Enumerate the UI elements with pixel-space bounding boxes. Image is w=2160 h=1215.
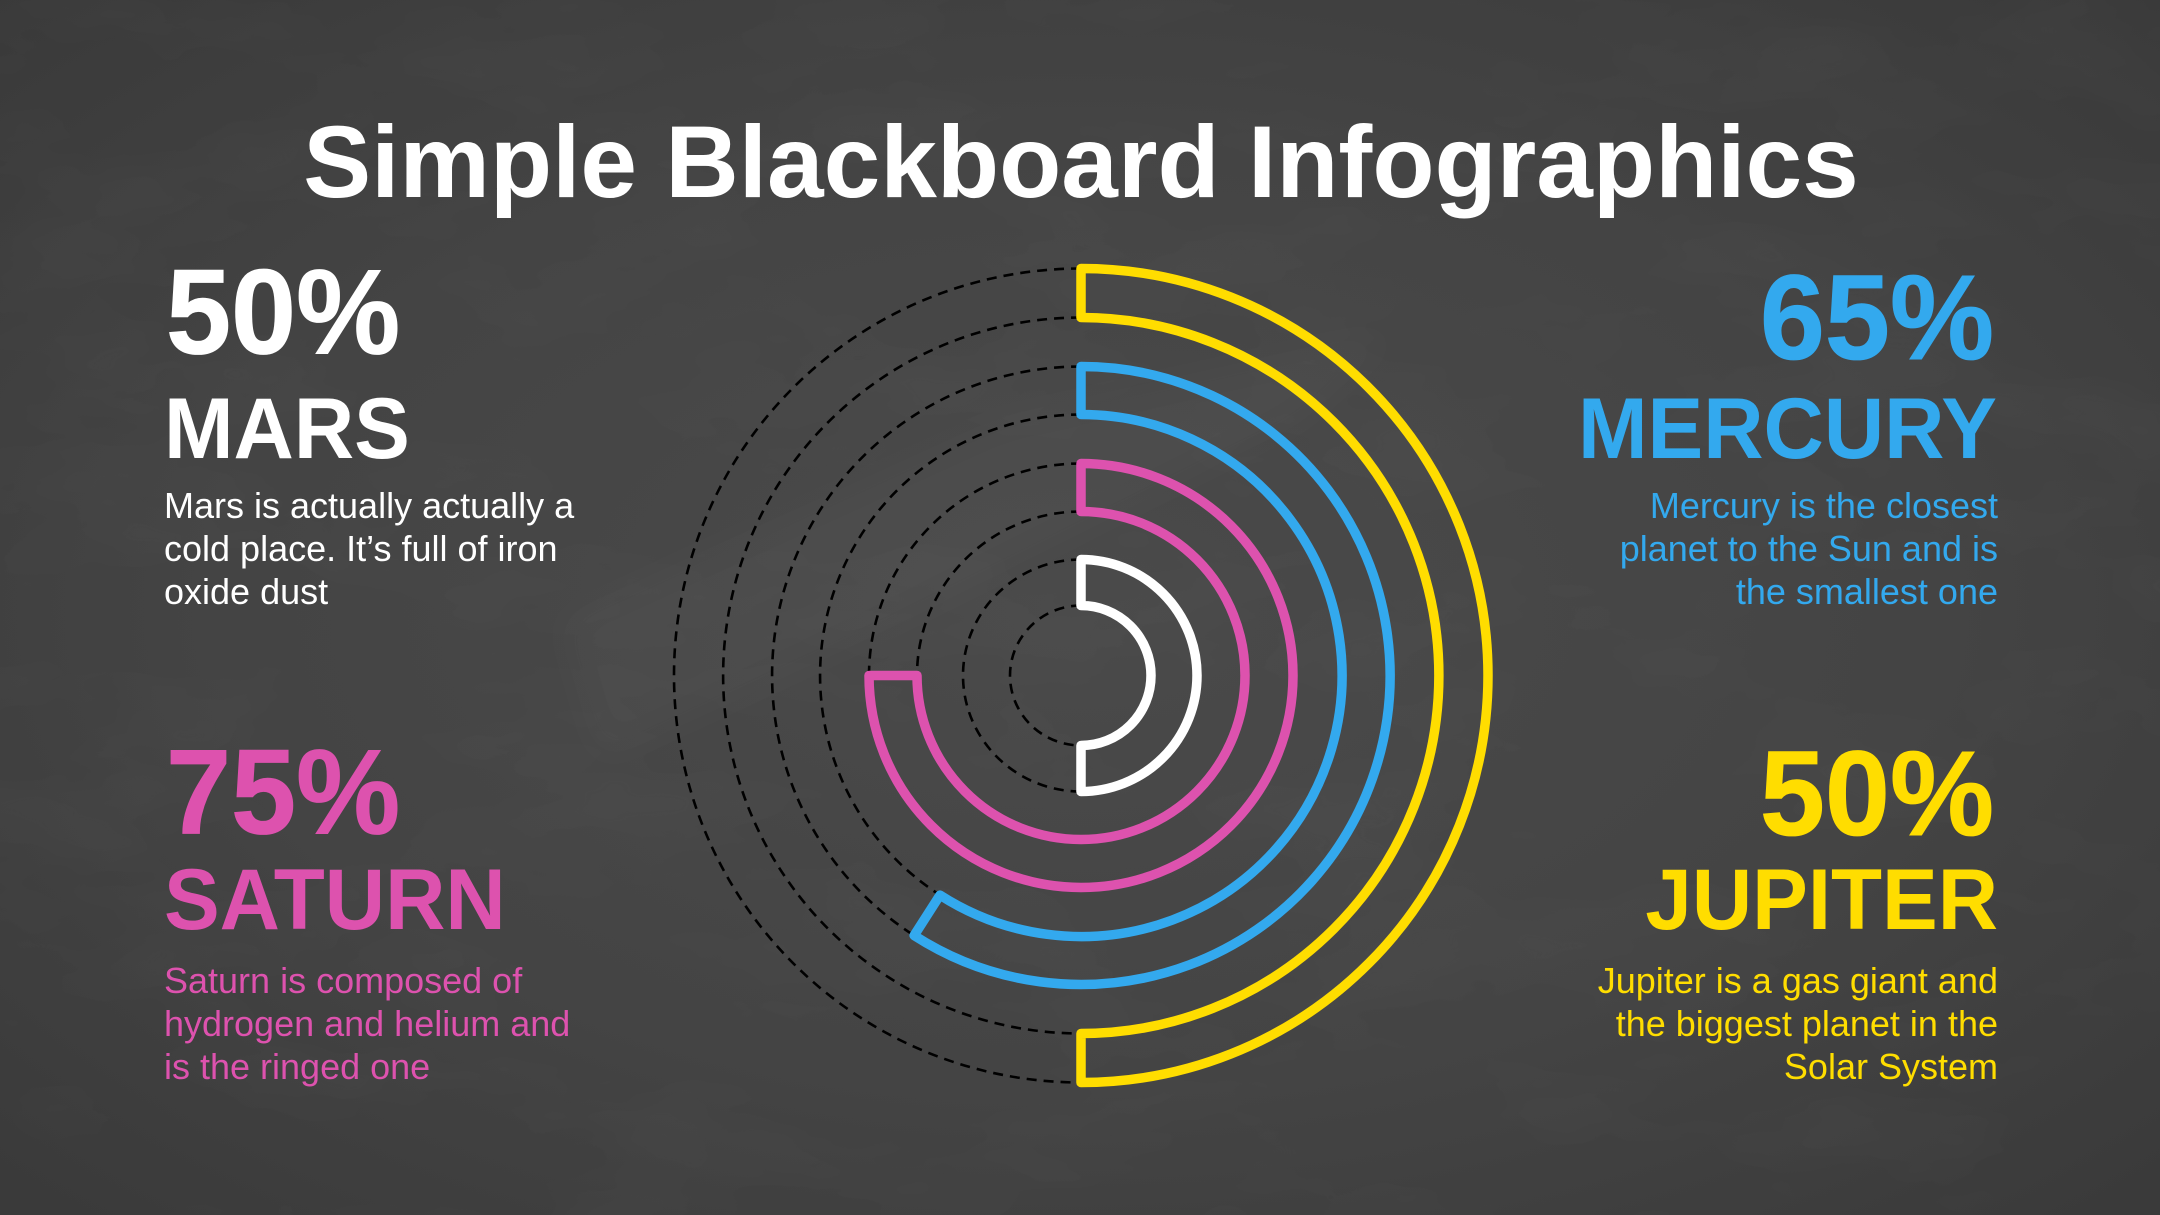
Saturn arc (869, 464, 1293, 888)
Mars name: MARS (164, 380, 410, 476)
Mercury description: Mercury is the closest (1650, 485, 1998, 526)
Jupiter percentage: 50% (1760, 726, 1994, 861)
panel: Saturn (164, 725, 570, 1087)
Jupiter description: the biggest planet in the (1616, 1003, 1998, 1044)
panel: Jupiter (1598, 726, 1998, 1087)
radial bar chart (674, 268, 1488, 1082)
Saturn name: SATURN (164, 851, 506, 947)
Jupiter description: Solar System (1784, 1046, 1998, 1087)
Mercury name: MERCURY (1578, 380, 1997, 476)
Jupiter description (1598, 960, 1998, 1087)
Mercury percentage: 65% (1760, 250, 1994, 385)
Saturn description (164, 960, 570, 1087)
Mars description (164, 485, 575, 612)
Mars description: cold place. It’s full of iron (164, 528, 558, 569)
Mercury arc (914, 366, 1390, 984)
panel: Mercury (1578, 250, 1998, 612)
Mars description: Mars is actually actually a (164, 485, 575, 526)
Saturn description: is the ringed one (164, 1046, 430, 1087)
Saturn percentage: 75% (166, 725, 400, 860)
Jupiter description: Jupiter is a gas giant and (1598, 960, 1998, 1001)
Mercury description: planet to the Sun and is (1620, 528, 1998, 569)
Mars percentage: 50% (166, 245, 400, 380)
Mars arc (1081, 560, 1197, 792)
Mars description: oxide dust (164, 571, 328, 612)
Saturn description: Saturn is composed of (164, 960, 523, 1001)
Jupiter name: JUPITER (1645, 851, 1998, 947)
dashed guide tracks (674, 268, 1081, 1082)
Jupiter arc (1081, 268, 1488, 1082)
panel: Mars (164, 245, 575, 612)
Mercury description (1620, 485, 1998, 612)
title: Simple Blackboard Infographics (303, 105, 1859, 219)
Saturn description: hydrogen and helium and (164, 1003, 570, 1044)
Mercury description: the smallest one (1736, 571, 1998, 612)
